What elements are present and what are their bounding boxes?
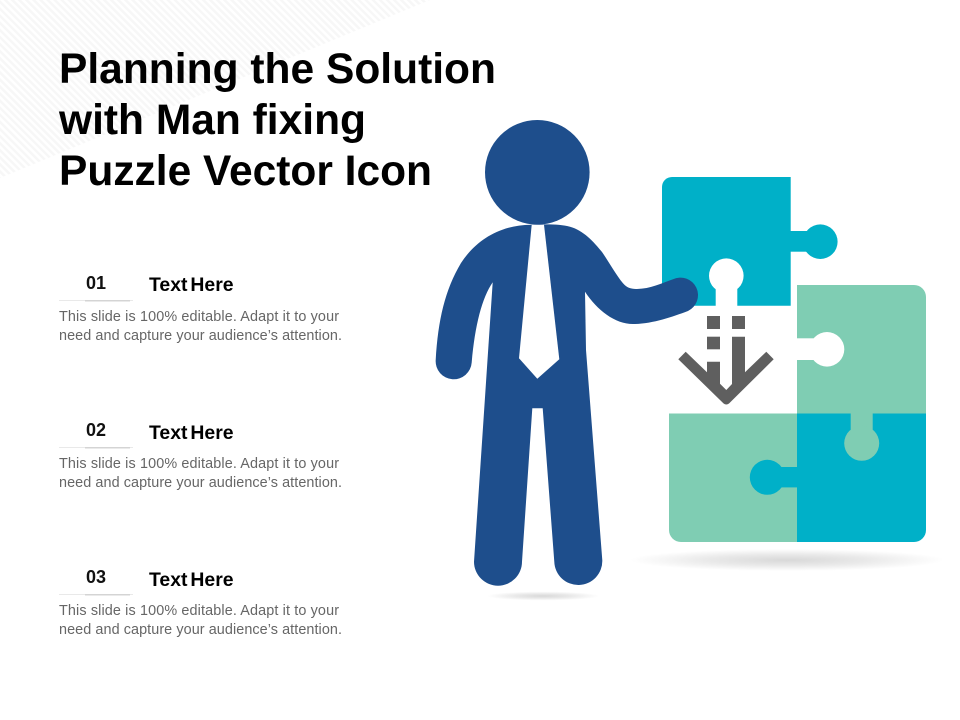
item 03 [59, 567, 342, 638]
icon: down arrow [678, 316, 774, 404]
description 01: need and capture your audience’s attention. [59, 328, 342, 344]
heading 03: Text Here [149, 569, 234, 591]
bottom teal piece green knob [844, 412, 879, 461]
puzzle piece: bottom teal [797, 414, 926, 542]
man body [436, 224, 698, 586]
puzzle shadow [630, 549, 944, 571]
number 03: 03 [86, 567, 106, 587]
title: with Man fixing [58, 97, 366, 144]
divider 03 [59, 594, 133, 596]
bottom green piece teal knob [750, 460, 798, 495]
number 01: 01 [86, 273, 106, 293]
title: Puzzle Vector Icon [59, 148, 432, 195]
heading 02: Text Here [149, 422, 234, 444]
description 03: This slide is 100% editable. Adapt it to your [59, 603, 339, 619]
number 02: 02 [86, 420, 106, 440]
description 02: need and capture your audience’s attention. [59, 475, 342, 491]
divider 02 [59, 447, 133, 448]
puzzle piece: right green [797, 285, 926, 414]
man tie [519, 225, 559, 379]
man shadow [487, 592, 599, 600]
divider 01 [59, 300, 133, 302]
puzzle piece: top teal [662, 177, 838, 306]
heading 01: Text Here [149, 274, 234, 296]
puzzle icon [662, 177, 926, 542]
man head [485, 120, 590, 225]
title: Planning the Solution [59, 46, 496, 93]
item 01 [59, 273, 342, 344]
top teal piece notch [709, 258, 744, 307]
description 02: This slide is 100% editable. Adapt it to your [59, 456, 339, 472]
puzzle piece: bottom green [669, 414, 797, 542]
man figure [436, 120, 698, 586]
right green piece notch [796, 332, 844, 367]
description 03: need and capture your audience’s attention. [59, 622, 342, 638]
item 02 [59, 420, 342, 491]
description 01: This slide is 100% editable. Adapt it to your [59, 309, 339, 325]
